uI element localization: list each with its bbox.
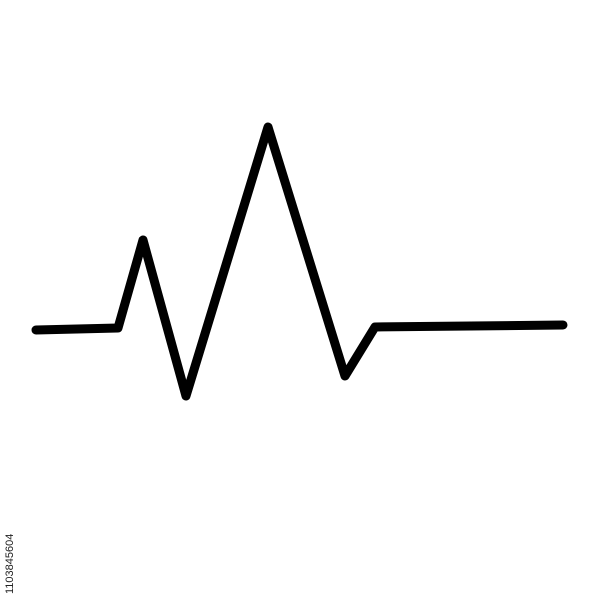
image id text: 1103845604 bbox=[4, 534, 16, 594]
